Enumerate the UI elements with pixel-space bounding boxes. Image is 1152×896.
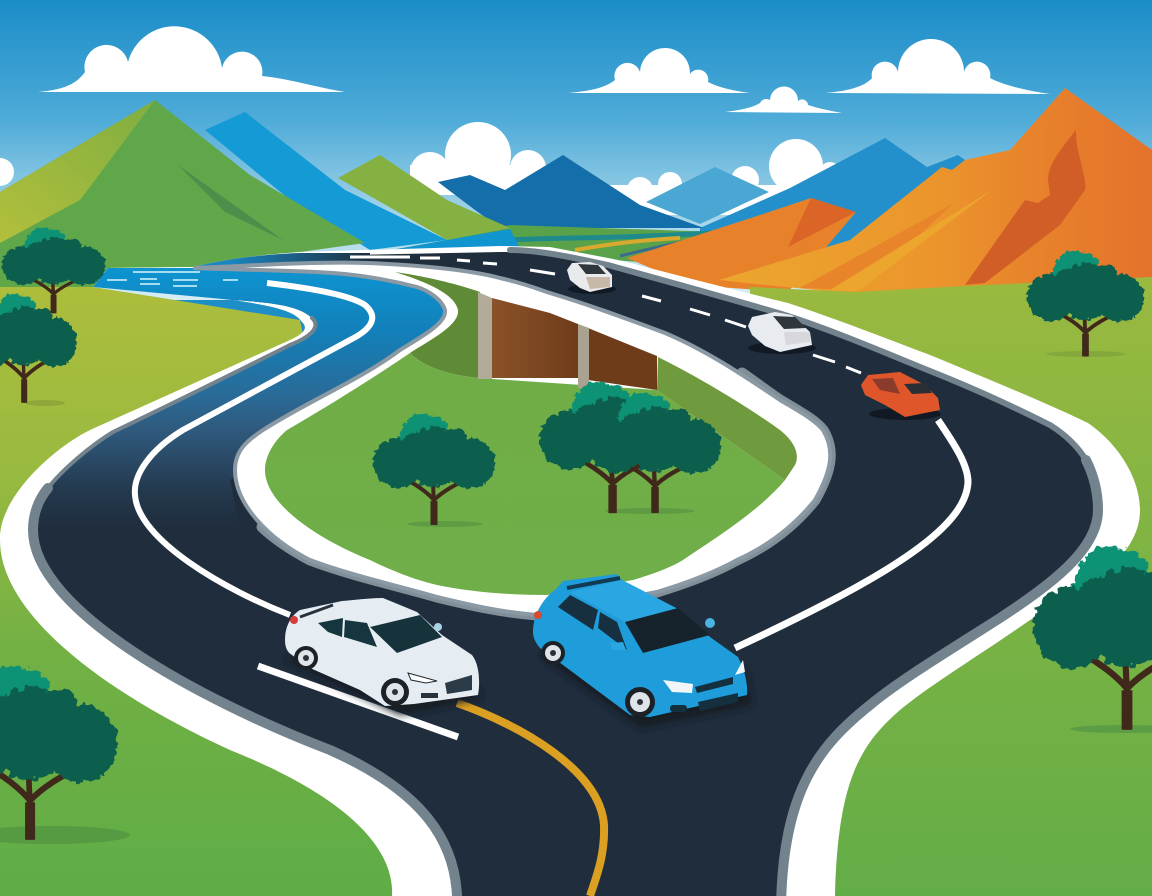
- sky: [0, 0, 1152, 300]
- road island: grass: [265, 353, 785, 595]
- road island: grey kerb: [262, 373, 830, 615]
- tree: island centre: [539, 382, 695, 514]
- lane marking: far blue road dashes: [107, 272, 238, 286]
- tree: lower right: [1033, 547, 1152, 733]
- road: asphalt: [33, 252, 1098, 896]
- tree: lower left: [0, 667, 130, 844]
- grass: right field: [750, 277, 1152, 896]
- car: mid white: [748, 312, 816, 354]
- car: far white: [567, 262, 616, 294]
- mountain: small orange: [627, 198, 856, 292]
- mountain: green left: [0, 100, 365, 287]
- mountain: light blue: [646, 167, 769, 224]
- cloud: small: [725, 86, 842, 113]
- car: red: [861, 372, 941, 420]
- grass: left field: [0, 287, 420, 896]
- valley: [380, 225, 722, 262]
- mountain: blue right: [700, 138, 965, 270]
- mountain: big orange: [719, 88, 1152, 294]
- lane marking: yellow line: [457, 703, 604, 896]
- mountain: blue left: [205, 112, 447, 250]
- cloud: behind mountains: [0, 122, 840, 215]
- car: white foreground: [285, 598, 482, 715]
- cloud: top centre: [568, 48, 750, 93]
- lane marking: left road centre line: [135, 283, 372, 615]
- tree: island left: [373, 414, 495, 527]
- road: grey kerbs: [33, 250, 1098, 896]
- lane marking: right road line: [735, 420, 968, 648]
- mountain: dark blue: [438, 155, 704, 228]
- tree: upper right: [1027, 251, 1144, 357]
- cloud: top right: [825, 39, 1050, 94]
- tree: left second: [0, 294, 77, 406]
- road island: white ring: [193, 263, 830, 615]
- road: upper far section: [193, 253, 370, 267]
- car: blue foreground: [533, 574, 752, 728]
- bridge: [478, 292, 657, 390]
- lane marking: upper road dashes: [350, 257, 861, 373]
- road: white outer edge: [0, 246, 1140, 896]
- road: blue-tinted far section: [33, 268, 450, 530]
- lane marking: stop line: [258, 666, 458, 737]
- cloud: top left: [38, 26, 345, 92]
- embankment: left wedge: [395, 272, 480, 378]
- tree: island right: [589, 393, 721, 513]
- tree: upper left: [2, 228, 105, 313]
- embankment: right slope: [657, 357, 797, 480]
- mountain: green centre: [338, 155, 510, 240]
